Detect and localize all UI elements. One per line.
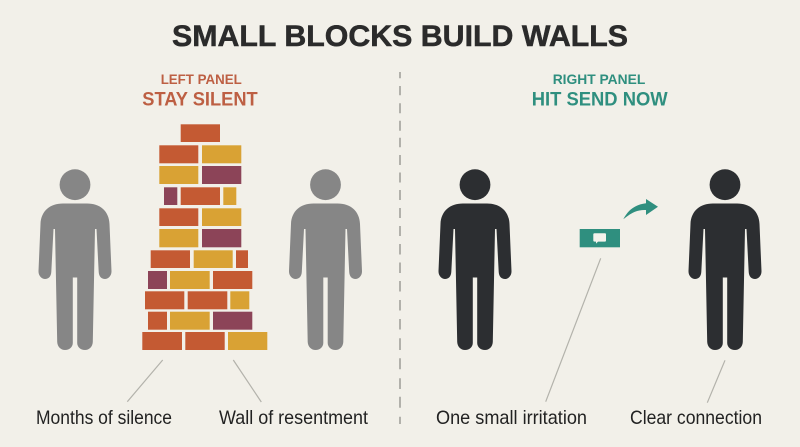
icon: grey person right: [289, 169, 362, 350]
callout: wall of resentment: [219, 360, 369, 429]
icon: dark person right: [688, 169, 762, 350]
callout: one small irritation: [436, 258, 601, 429]
callout: clear connection: [630, 360, 762, 429]
heading: right panel: HIT SEND NOW: [532, 89, 668, 111]
callout: clear connection: Clear connection: [630, 407, 762, 429]
heading: left panel: STAY SILENT: [142, 89, 258, 111]
callout: wall of resentment: Wall of resentment: [219, 407, 369, 429]
callout: months of silence: Months of silence: [36, 407, 172, 429]
icon: message block: [580, 229, 620, 247]
panel: right (hit send now): [436, 71, 762, 429]
icon: grey person left: [38, 169, 112, 350]
panel: left (stay silent): [36, 71, 369, 429]
heading: left panel: LEFT PANEL: [161, 71, 242, 87]
brick wall: [142, 124, 267, 350]
callout: one small irritation: One small irritation: [436, 407, 587, 429]
heading: right panel: RIGHT PANEL: [553, 71, 646, 87]
heading: right panel: [532, 71, 668, 111]
callout: months of silence: [36, 360, 172, 429]
arrow: [623, 199, 658, 219]
heading: left panel: [142, 71, 258, 111]
title: SMALL BLOCKS BUILD WALLS: [172, 20, 628, 53]
icon: dark person left: [438, 169, 512, 350]
